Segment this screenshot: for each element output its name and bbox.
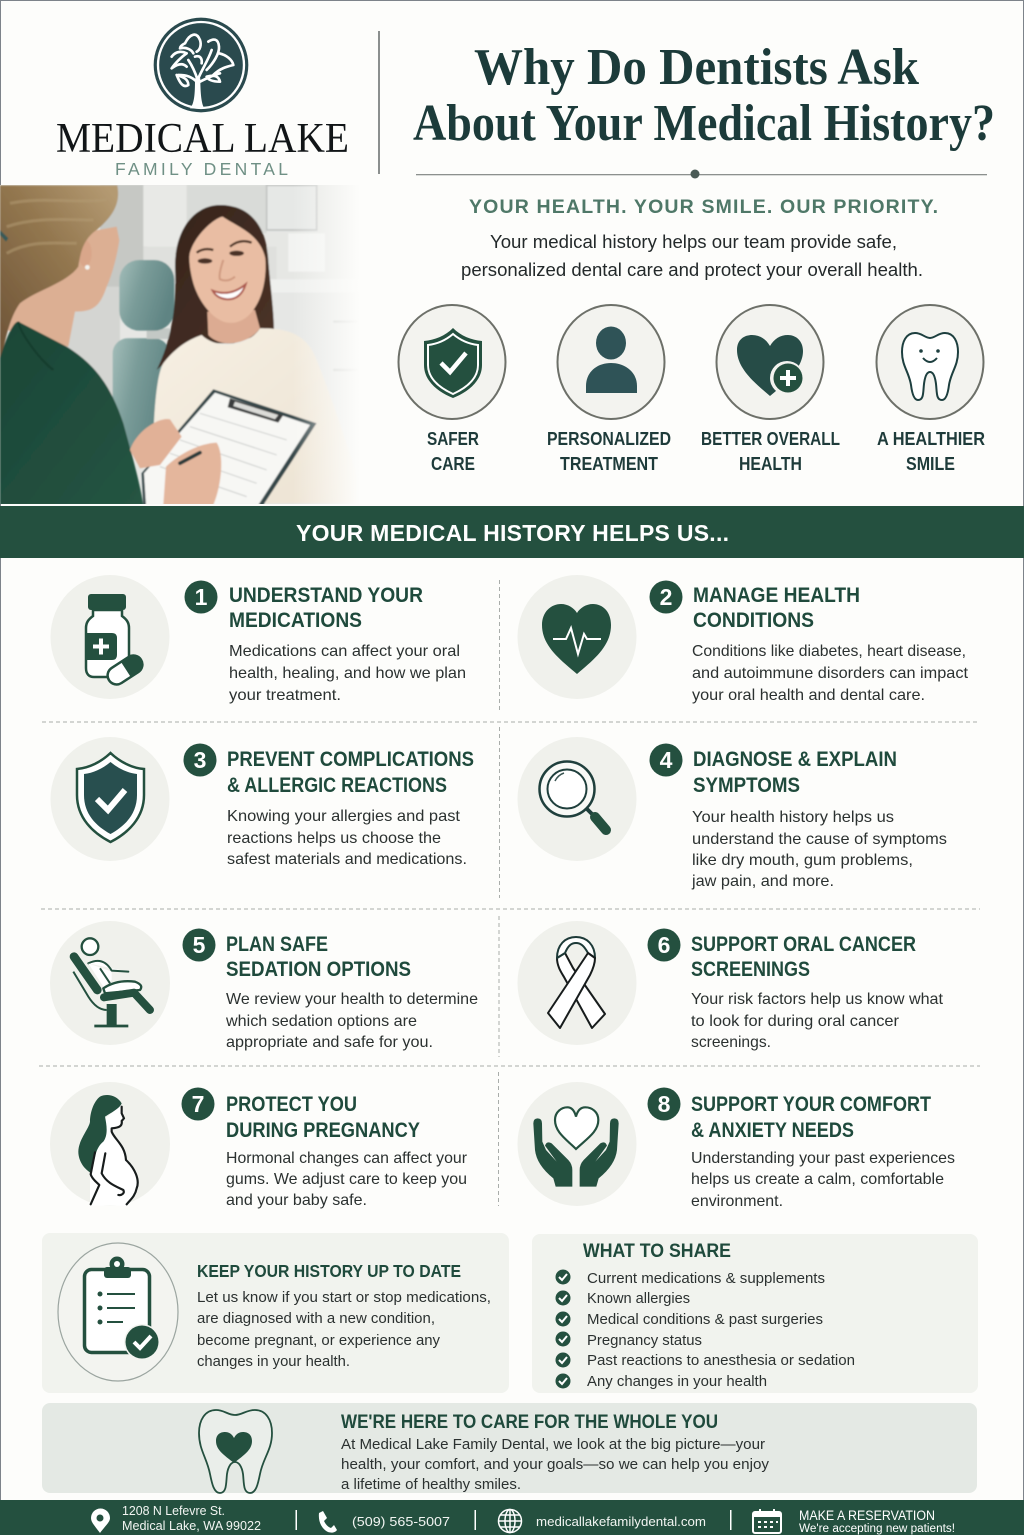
panel heading: WE'RE HERE TO CARE FOR THE WHOLE YOU bbox=[341, 1412, 718, 1433]
number badge 1 bbox=[184, 580, 218, 614]
panel: here to care for the whole you bbox=[42, 1403, 977, 1493]
heading: UNDERSTAND YOUR bbox=[229, 584, 423, 607]
number badge 8: 8 bbox=[658, 1091, 671, 1117]
body text: jaw pain, and more. bbox=[691, 873, 834, 890]
panel text: become pregnant, or experience any bbox=[197, 1332, 440, 1349]
number badge 6: 6 bbox=[658, 932, 670, 958]
body text: and autoimmune disorders can impact bbox=[692, 665, 969, 682]
heading: SUPPORT YOUR COMFORT bbox=[691, 1093, 931, 1116]
body text: Medications can affect your oral bbox=[229, 643, 460, 660]
panel text: Let us know if you start or stop medications, bbox=[197, 1289, 491, 1306]
reservation text bbox=[799, 1508, 955, 1535]
body text: helps us create a calm, comfortable bbox=[691, 1171, 944, 1188]
reservation text: We're accepting new patients! bbox=[799, 1523, 955, 1535]
heading: MANAGE HEALTH bbox=[693, 584, 860, 607]
checklist: Past reactions to anesthesia or sedation bbox=[587, 1352, 855, 1369]
body text: Knowing your allergies and past bbox=[227, 808, 461, 825]
panel text: changes in your health. bbox=[197, 1353, 350, 1370]
body text bbox=[226, 1150, 468, 1209]
item 5: plan safe sedation options bbox=[50, 921, 478, 1051]
icon: medicine bottle bbox=[86, 594, 146, 688]
body text: Conditions like diabetes, heart disease, bbox=[692, 643, 966, 660]
heading: PREVENT COMPLICATIONS bbox=[227, 748, 474, 771]
benefit: personalized treatment: PERSONALIZED bbox=[547, 429, 671, 449]
item 8: support comfort and anxiety needs bbox=[518, 1082, 955, 1210]
number badge 2 bbox=[650, 580, 682, 614]
benefit: safer care: CARE bbox=[431, 454, 475, 474]
website: medicallakefamilydental.com bbox=[536, 1514, 706, 1529]
panel text bbox=[341, 1436, 769, 1493]
body text bbox=[692, 643, 969, 704]
body text bbox=[225, 991, 478, 1051]
heading: CONDITIONS bbox=[693, 609, 814, 632]
heading: DIAGNOSE & EXPLAIN bbox=[693, 748, 897, 771]
body text: Understanding your past experiences bbox=[691, 1150, 955, 1167]
body text bbox=[227, 808, 467, 868]
body text bbox=[229, 643, 466, 704]
checklist: Pregnancy status bbox=[587, 1332, 702, 1349]
body text: appropriate and safe for you. bbox=[226, 1034, 433, 1051]
body text: to look for during oral cancer bbox=[691, 1013, 900, 1030]
icon: tooth with heart bbox=[199, 1410, 272, 1493]
section banner bbox=[0, 506, 1024, 558]
heading: SEDATION OPTIONS bbox=[226, 958, 411, 981]
body text: Your health history helps us bbox=[692, 809, 894, 826]
number badge 7 bbox=[182, 1088, 214, 1120]
intro text: personalized dental care and protect your overall health. bbox=[461, 259, 923, 280]
number badge 8 bbox=[648, 1088, 680, 1120]
benefit: a healthier smile bbox=[876, 305, 985, 474]
item 1: understand your medications bbox=[50, 575, 466, 704]
footer bar bbox=[0, 1500, 1024, 1535]
logo wordmark: MEDICAL LAKE bbox=[56, 116, 349, 162]
body text: environment. bbox=[691, 1193, 783, 1210]
number badge 2: 2 bbox=[660, 584, 672, 610]
intro text bbox=[461, 231, 923, 280]
icon: shield with check bbox=[77, 753, 144, 842]
body text: like dry mouth, gum problems, bbox=[692, 852, 913, 869]
body text: understand the cause of symptoms bbox=[692, 831, 947, 848]
panel text: health, your comfort, and your goals—so we can help you enjoy bbox=[341, 1456, 769, 1473]
checklist: Medical conditions & past surgeries bbox=[587, 1311, 823, 1328]
icon: dental chair bbox=[73, 938, 150, 1026]
phone number: (509) 565-5007 bbox=[352, 1514, 450, 1529]
body text: We review your health to determine bbox=[226, 991, 478, 1008]
logo subline: FAMILY DENTAL bbox=[115, 159, 288, 179]
address: Medical Lake, WA 99022 bbox=[122, 1518, 261, 1533]
number badge 5 bbox=[182, 928, 216, 962]
heading: & ALLERGIC REACTIONS bbox=[227, 774, 447, 797]
address bbox=[122, 1503, 261, 1533]
body text: reactions helps us choose the bbox=[227, 830, 441, 847]
heading: PROTECT YOU bbox=[226, 1093, 357, 1116]
heading bbox=[229, 584, 423, 632]
heading bbox=[226, 933, 411, 981]
benefit: safer care: SAFER bbox=[427, 429, 479, 449]
logo bbox=[56, 18, 349, 179]
body text bbox=[691, 809, 947, 890]
heading bbox=[693, 584, 860, 632]
icon: pregnant woman bbox=[78, 1095, 138, 1206]
benefit: personalized treatment: TREATMENT bbox=[560, 454, 658, 474]
item 6: support oral cancer screenings bbox=[518, 921, 944, 1051]
body text: gums. We adjust care to keep you bbox=[226, 1171, 467, 1188]
body text: Hormonal changes can affect your bbox=[226, 1150, 468, 1167]
section banner: YOUR MEDICAL HISTORY HELPS US... bbox=[296, 520, 729, 546]
panel text: are diagnosed with a new condition, bbox=[197, 1310, 435, 1327]
body text: your treatment. bbox=[229, 687, 341, 704]
benefit: safer care bbox=[398, 305, 506, 474]
tagline: YOUR HEALTH. YOUR SMILE. OUR PRIORITY. bbox=[469, 196, 938, 218]
panel text: At Medical Lake Family Dental, we look at the big picture—your bbox=[341, 1436, 765, 1453]
panel: what to share bbox=[532, 1234, 978, 1393]
benefit: better overall health: HEALTH bbox=[739, 454, 802, 474]
checklist: Known allergies bbox=[587, 1290, 690, 1307]
panel text: a lifetime of healthy smiles. bbox=[341, 1476, 521, 1493]
heading bbox=[691, 1093, 931, 1142]
heading: SCREENINGS bbox=[691, 958, 810, 981]
benefit icons row bbox=[398, 305, 985, 474]
number badge 3 bbox=[184, 744, 216, 776]
number badge 4: 4 bbox=[660, 747, 673, 773]
logo emblem: tree in circle bbox=[154, 18, 248, 112]
number badge 3: 3 bbox=[194, 747, 206, 773]
icon: heart with pulse bbox=[542, 604, 611, 674]
heading bbox=[693, 748, 897, 797]
icon: globe bbox=[498, 1510, 522, 1532]
icon: location pin bbox=[91, 1508, 110, 1533]
item 4: diagnose and explain symptoms bbox=[518, 737, 947, 890]
icon: phone bbox=[319, 1511, 337, 1533]
checklist bbox=[556, 1270, 855, 1390]
item 3: prevent complications bbox=[50, 737, 474, 868]
heading bbox=[227, 748, 474, 797]
number badge 7: 7 bbox=[192, 1091, 204, 1117]
heading bbox=[691, 933, 916, 981]
dentist bbox=[0, 185, 221, 505]
body text: safest materials and medications. bbox=[227, 851, 467, 868]
benefit: a healthier smile: SMILE bbox=[906, 454, 955, 474]
heading: DURING PREGNANCY bbox=[226, 1119, 420, 1142]
panel heading: KEEP YOUR HISTORY UP TO DATE bbox=[197, 1261, 461, 1281]
panel text bbox=[197, 1289, 491, 1370]
body text: Your risk factors help us know what bbox=[691, 991, 944, 1008]
benefit: a healthier smile: A HEALTHIER bbox=[877, 429, 985, 449]
benefit: personalized treatment bbox=[547, 305, 671, 474]
patient bbox=[152, 204, 328, 504]
body text: screenings. bbox=[691, 1034, 771, 1051]
icon: hands holding heart bbox=[533, 1107, 619, 1187]
body text: health, healing, and how we plan bbox=[229, 665, 466, 682]
body text bbox=[691, 991, 944, 1051]
title: Why Do Dentists Ask bbox=[474, 39, 919, 96]
heading: PLAN SAFE bbox=[226, 933, 328, 956]
intro text: Your medical history helps our team provide safe, bbox=[490, 231, 897, 252]
panel: keep your history up to date bbox=[42, 1233, 509, 1393]
body text: and your baby safe. bbox=[226, 1192, 367, 1209]
checklist: Any changes in your health bbox=[587, 1373, 767, 1390]
icon: clipboard checklist bbox=[58, 1243, 178, 1381]
heading: & ANXIETY NEEDS bbox=[691, 1119, 854, 1142]
photo: dentist and patient with clipboard bbox=[0, 185, 375, 506]
benefit: better overall health: BETTER OVERALL bbox=[701, 429, 840, 449]
body text: which sedation options are bbox=[225, 1013, 417, 1030]
panel heading: WHAT TO SHARE bbox=[583, 1241, 731, 1262]
number badge 4 bbox=[650, 744, 682, 776]
item 7: protect you during pregnancy bbox=[50, 1082, 468, 1209]
reservation text: MAKE A RESERVATION bbox=[799, 1508, 935, 1523]
heading: SYMPTOMS bbox=[693, 774, 800, 797]
heading: MEDICATIONS bbox=[229, 609, 362, 632]
icon: calendar bbox=[753, 1509, 781, 1533]
heading bbox=[226, 1093, 420, 1142]
number badge 5: 5 bbox=[193, 932, 206, 958]
number badge 1: 1 bbox=[195, 584, 208, 610]
clipboard bbox=[142, 389, 317, 505]
icon: awareness ribbon bbox=[548, 937, 605, 1028]
title bbox=[413, 39, 995, 152]
clinic background bbox=[66, 185, 342, 397]
benefit: better overall health bbox=[701, 305, 840, 474]
icon: magnifying glass bbox=[540, 762, 606, 830]
body text bbox=[691, 1150, 955, 1210]
checklist: Current medications & supplements bbox=[587, 1270, 825, 1287]
patient chair bbox=[113, 260, 174, 448]
item 2: manage health conditions bbox=[518, 575, 969, 704]
address: 1208 N Lefevre St. bbox=[122, 1503, 225, 1518]
body text: your oral health and dental care. bbox=[692, 687, 925, 704]
number badge 6 bbox=[648, 928, 680, 962]
heading: SUPPORT ORAL CANCER bbox=[691, 933, 916, 956]
